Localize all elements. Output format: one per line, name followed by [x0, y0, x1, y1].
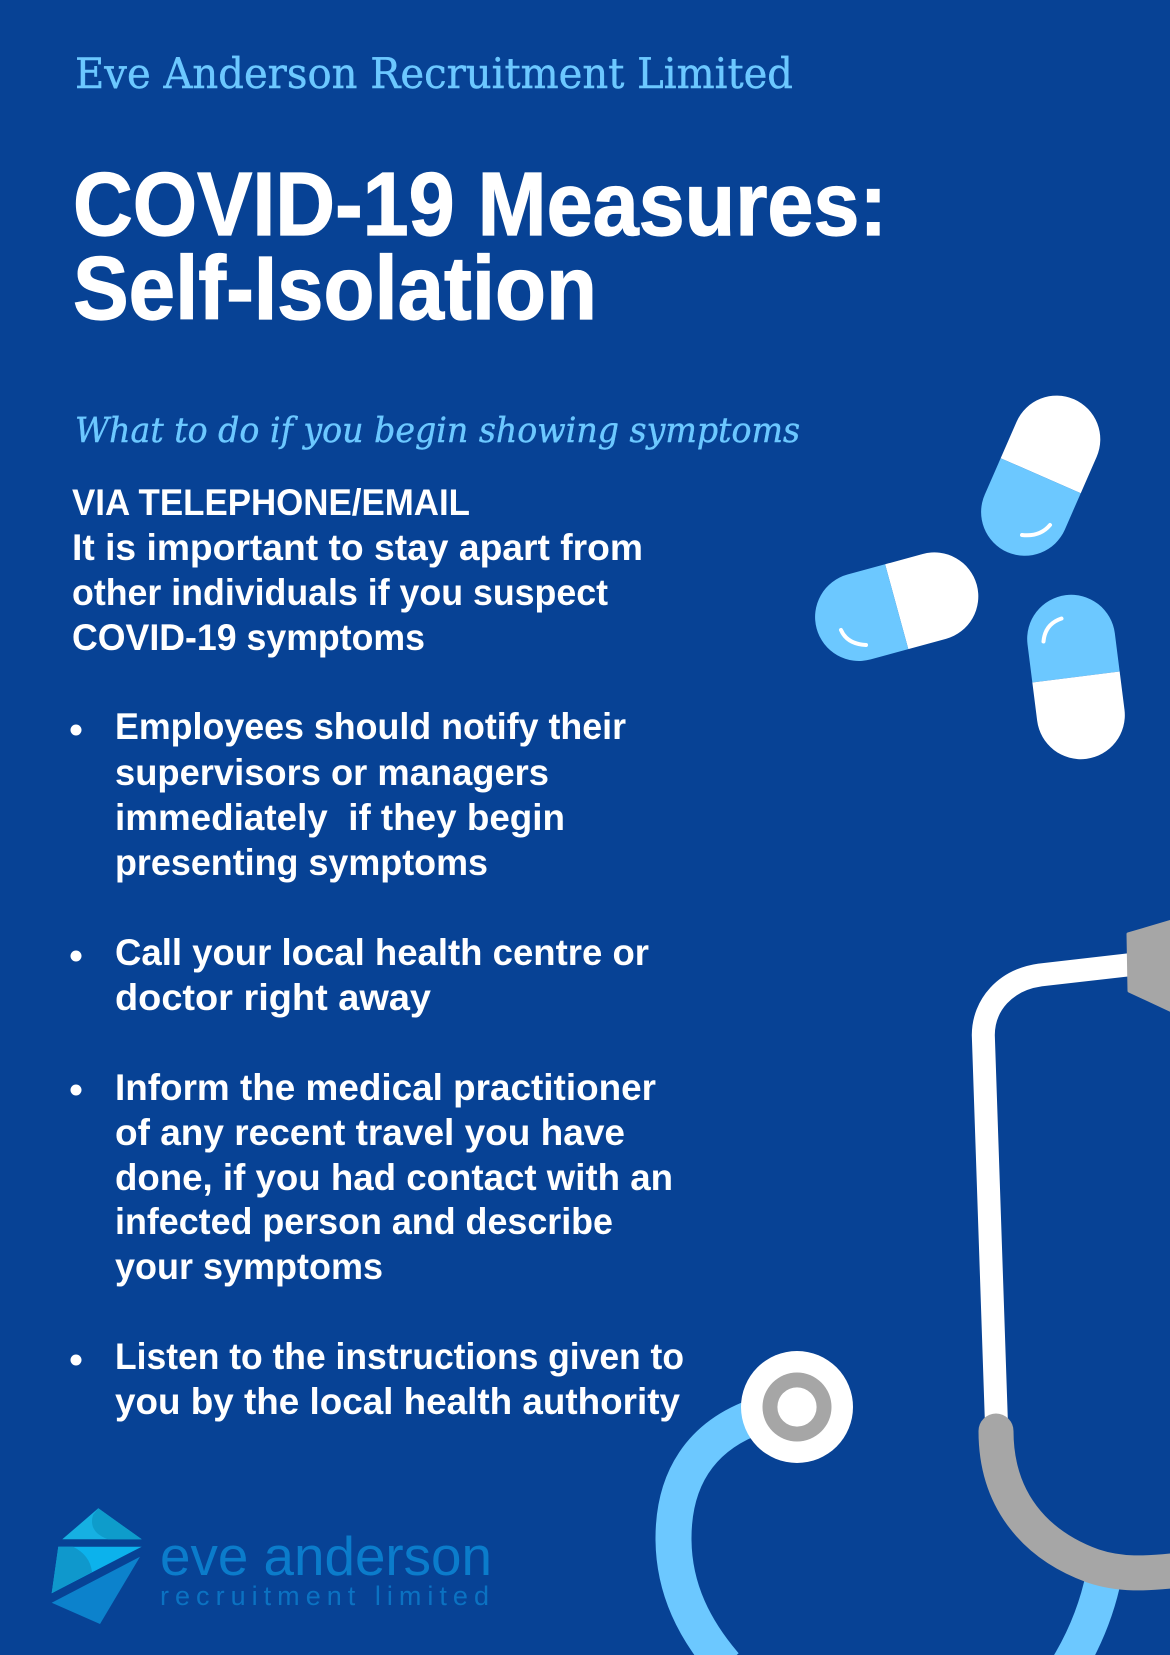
bullet: inform practitioner: done, if you had contact with an [115, 1157, 673, 1198]
bullet: inform practitioner [70, 1067, 673, 1287]
title: Self-Isolation [73, 239, 597, 339]
logo wordmark: recruitment limited [160, 1581, 489, 1611]
intro text block: COVID-19 symptoms [72, 617, 425, 658]
intro text block: VIA TELEPHONE/EMAIL [72, 482, 470, 523]
bullet: notify supervisors: Employees should notify their [115, 706, 626, 747]
icon: stethoscope [673, 921, 1170, 1655]
intro text block [72, 482, 643, 658]
bullet: call health centre: doctor right away [115, 977, 431, 1018]
bullet: inform practitioner: infected person and describe [115, 1201, 613, 1242]
company name heading: Eve Anderson Recruitment Limited [75, 49, 793, 98]
bullet: listen to instructions [70, 1336, 684, 1422]
icon: right pill [1022, 590, 1130, 764]
bullet: notify supervisors [70, 706, 626, 883]
logo mark [52, 1508, 142, 1624]
intro text block: other individuals if you suspect [72, 572, 608, 613]
logo wordmark: eve anderson [160, 1525, 492, 1587]
bullet: call health centre: Call your local health centre or [115, 932, 649, 973]
subtitle: What to do if you begin showing symptoms [75, 411, 800, 451]
bullet: listen to instructions: Listen to the instructions given to [115, 1336, 684, 1377]
title [73, 155, 887, 339]
bullet: inform practitioner: Inform the medical practitioner [115, 1067, 656, 1108]
bullet: notify supervisors: immediately if they begin [115, 797, 565, 838]
logo: Eve Anderson Recruitment Limited [52, 1508, 492, 1624]
bullet: call health centre [70, 932, 649, 1018]
icon: left pill [805, 542, 988, 671]
bullet: notify supervisors: presenting symptoms [115, 842, 488, 883]
icon: top pill [967, 382, 1114, 570]
bullet: inform practitioner: your symptoms [115, 1246, 383, 1287]
bullet: notify supervisors: supervisors or managers [115, 752, 549, 793]
intro text block: It is important to stay apart from [72, 527, 643, 568]
bullet: listen to instructions: you by the local health authority [115, 1381, 680, 1422]
bullet: inform practitioner: of any recent travel you have [115, 1112, 625, 1153]
title: COVID-19 Measures: [73, 155, 887, 255]
